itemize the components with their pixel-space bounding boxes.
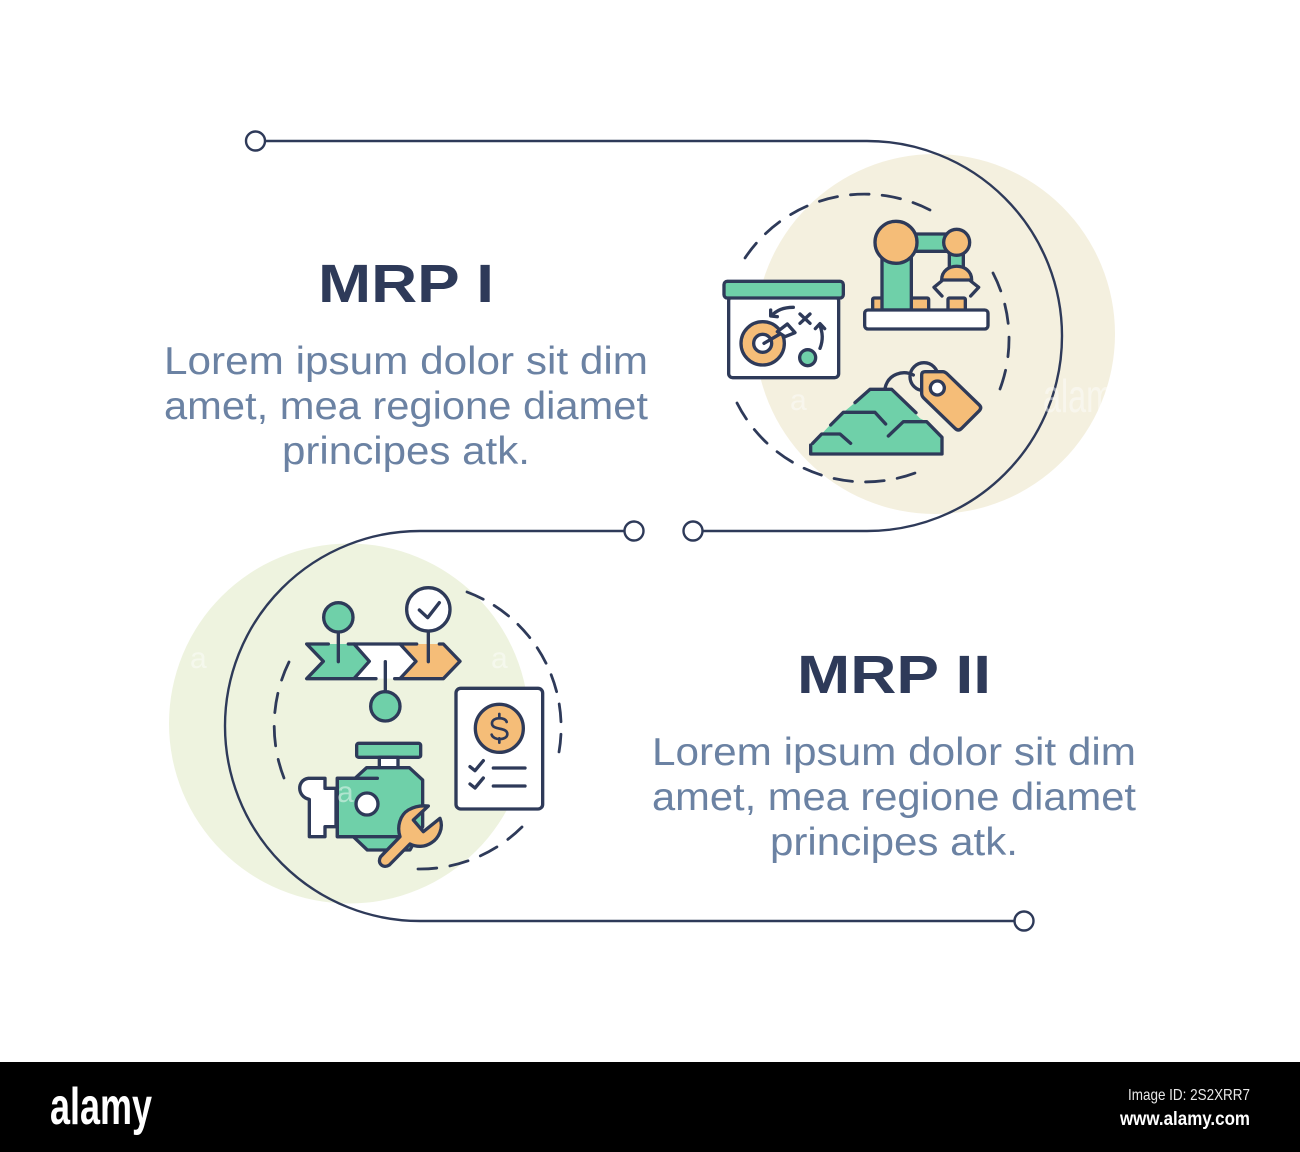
heading: MRP I: MRP I xyxy=(318,254,494,314)
icon group: MRP II xyxy=(300,588,543,866)
icon: financial report xyxy=(456,688,543,809)
heading: MRP II: MRP II xyxy=(797,645,991,705)
icon group: MRP I xyxy=(724,221,988,454)
icon: process timeline xyxy=(307,588,460,721)
footer image id: Image ID: 2S2XRR7 xyxy=(1128,1087,1250,1104)
icon: robot arm xyxy=(865,221,988,329)
footer url: www.alamy.com xyxy=(1119,1109,1250,1130)
watermark marks xyxy=(190,370,1113,809)
text block: MRP II: principes atk. xyxy=(770,821,1018,864)
watermark marks: alam xyxy=(1043,370,1113,422)
background circle: MRP II xyxy=(169,544,529,904)
watermark marks: a xyxy=(491,642,508,675)
text block: MRP I: Lorem ipsum dolor sit dim xyxy=(164,340,648,383)
icon: engine with wrench xyxy=(300,743,441,866)
watermark marks: a xyxy=(190,642,207,675)
text block: MRP I: principes atk. xyxy=(282,430,530,473)
text block: MRP II: Lorem ipsum dolor sit dim xyxy=(652,731,1136,774)
footer logo: alamy xyxy=(50,1078,152,1136)
dashed ring: MRP I xyxy=(737,194,1009,482)
dashed ring: MRP II xyxy=(274,592,561,869)
text block: MRP I: amet, mea regione diamet xyxy=(164,385,648,428)
watermark marks: a xyxy=(790,384,807,417)
text block: MRP II: amet, mea regione diamet xyxy=(652,776,1136,819)
icon: tagged material pile xyxy=(811,363,981,454)
connector line: MRP I xyxy=(246,132,1062,540)
icon: strategy board xyxy=(724,281,843,378)
connector line: MRP II xyxy=(225,522,1034,930)
footer bar xyxy=(0,1062,1300,1152)
text block: MRP I xyxy=(164,340,648,473)
watermark marks: a xyxy=(337,776,354,809)
text block: MRP II xyxy=(652,731,1136,864)
background circle: MRP I xyxy=(755,154,1115,514)
